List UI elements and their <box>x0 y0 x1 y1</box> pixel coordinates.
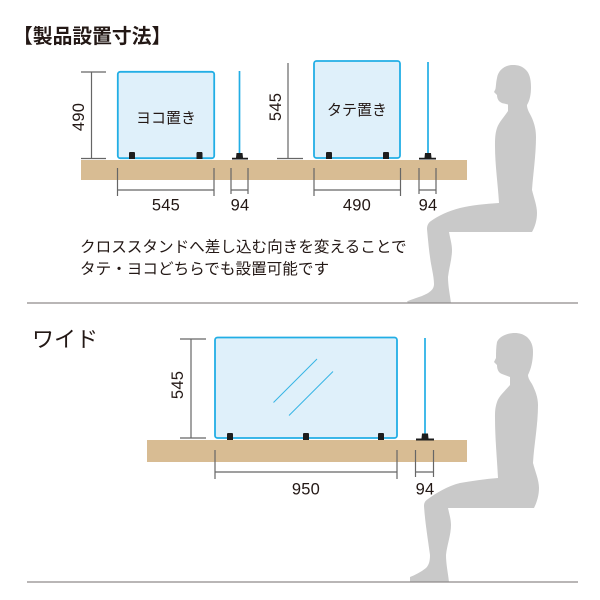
height dimension: 490 <box>70 72 106 158</box>
description text: タテ・ヨコどちらでも設置可能です <box>80 260 329 278</box>
heading: wide: ワイド <box>32 327 98 352</box>
seated person silhouette: bottom <box>410 333 539 582</box>
depth dimension: 94: 94 <box>416 480 434 498</box>
depth dimension: 94: 94 <box>231 196 249 214</box>
clamp <box>303 433 309 440</box>
clamp <box>326 152 332 159</box>
panel: horizontal placement: ヨコ置き <box>136 110 196 127</box>
width dimension: 545 <box>118 168 214 214</box>
title: 【製品設置寸法】 <box>13 26 171 48</box>
height dimension: 545 <box>267 63 303 158</box>
height dimension: 545 <box>169 339 206 438</box>
width dimension: 950 <box>215 450 397 498</box>
clamp <box>383 152 389 159</box>
panel: vertical placement: タテ置き <box>327 102 387 119</box>
description text <box>80 238 407 278</box>
depth dimension: 94 <box>419 168 437 214</box>
side view: horizontal placement <box>232 71 248 160</box>
depth dimension: 94 <box>231 168 249 214</box>
panel: horizontal placement <box>118 72 214 158</box>
clamp <box>227 433 233 440</box>
section: standard placements <box>70 61 467 214</box>
section: wide placement <box>147 338 467 498</box>
panel: wide <box>215 338 397 438</box>
width dimension: 950: 950 <box>292 480 320 498</box>
width dimension: 490: 490 <box>343 196 371 214</box>
desk: top section <box>81 160 467 180</box>
floor line: top <box>27 302 578 304</box>
panel: vertical placement <box>314 61 400 158</box>
desk: bottom section <box>147 440 467 462</box>
height dimension: 545: 545 <box>267 93 285 121</box>
clamp <box>378 433 384 440</box>
side view: wide <box>416 338 434 440</box>
depth dimension: 94 <box>416 450 434 498</box>
depth dimension: 94: 94 <box>419 196 437 214</box>
description text: クロススタンドへ差し込む向きを変えることで <box>80 238 407 256</box>
height dimension: 545: 545 <box>169 371 187 399</box>
height dimension: 490: 490 <box>70 103 88 131</box>
side view: vertical placement <box>419 62 436 160</box>
seated person silhouette: top <box>407 65 537 303</box>
clamp <box>196 152 202 159</box>
width dimension: 545: 545 <box>152 196 180 214</box>
clamp <box>129 152 135 159</box>
floor line: bottom <box>27 581 578 583</box>
width dimension: 490 <box>314 168 400 214</box>
